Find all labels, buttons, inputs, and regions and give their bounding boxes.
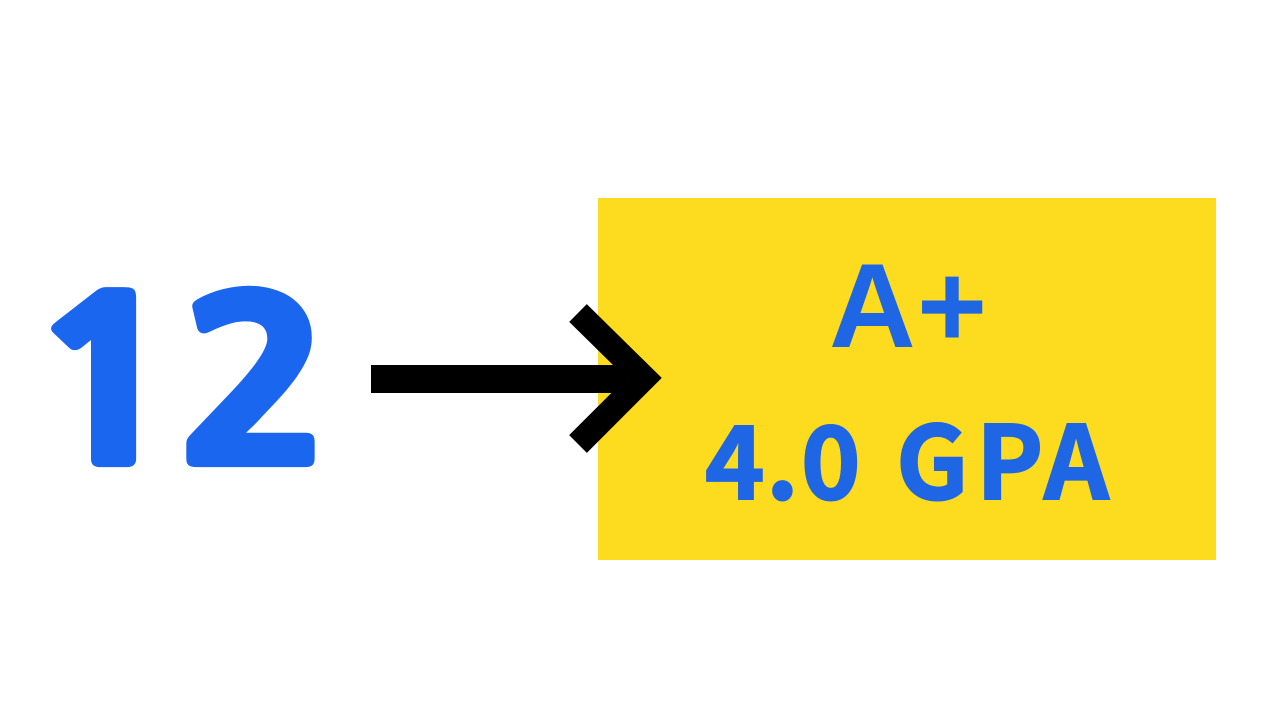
- score number 12: 1: [27, 273, 189, 496]
- GPA 4.0: GPA: [896, 383, 1110, 529]
- arrow: [371, 313, 644, 444]
- score number 12: [27, 272, 332, 496]
- GPA 4.0: 4.0: [705, 383, 861, 529]
- score number 12: 2: [177, 272, 332, 495]
- panel: yellow grade box: [598, 198, 1216, 560]
- grade A+: A+: [829, 239, 987, 373]
